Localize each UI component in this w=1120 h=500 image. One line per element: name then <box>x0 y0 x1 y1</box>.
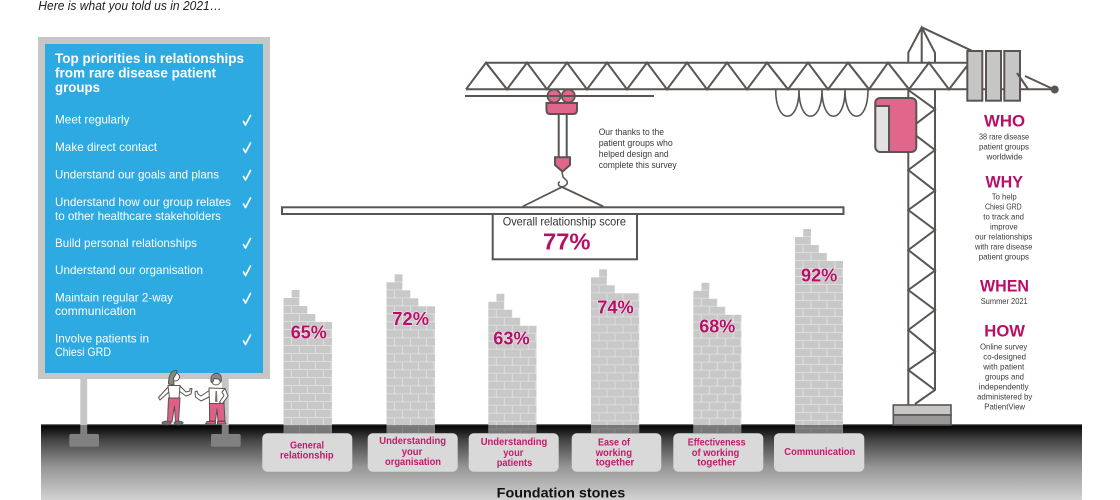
who block: 38 rare disease <box>979 132 1029 142</box>
panel heading: Top priorities in relationships <box>55 51 244 66</box>
label: ease of working together <box>572 433 661 472</box>
who block: WHO <box>984 113 1025 131</box>
label: understanding your patients <box>469 433 559 472</box>
icon: two people thumbs up <box>158 370 228 425</box>
priority list: Chiesi GRD <box>55 345 111 359</box>
why block: To help <box>992 191 1017 201</box>
why block: improve <box>990 221 1018 231</box>
brick column: effectiveness of working together 68% <box>693 283 741 433</box>
how block: co-designed <box>983 351 1026 361</box>
priority list: Understand our goals and plans <box>55 168 219 182</box>
suspended beam <box>282 207 844 214</box>
why block: WHY <box>986 173 1023 191</box>
priority list <box>55 112 231 359</box>
priority list: Meet regularly <box>55 112 130 126</box>
why block: with rare disease <box>974 241 1032 251</box>
woman <box>158 370 192 425</box>
brick column: communication 92% <box>795 229 843 433</box>
counterweights <box>967 51 1020 101</box>
panel heading: from rare disease patient <box>55 66 216 80</box>
cable loops <box>776 90 868 116</box>
label: understanding your organisation: Understanding <box>379 436 446 447</box>
thanks note <box>599 127 677 170</box>
crane mast top <box>908 27 972 63</box>
why block <box>974 173 1032 261</box>
crane tower <box>908 90 935 405</box>
how block: HOW <box>984 323 1025 341</box>
brick column: understanding your organisation 72%: 72% <box>392 309 429 329</box>
brick column: general relationship 65% <box>284 290 332 433</box>
label: effectiveness of working together: of working <box>692 448 739 459</box>
man <box>195 373 228 424</box>
panel: top priorities billboard <box>38 37 270 379</box>
brick column: understanding your patients 63%: 63% <box>493 329 530 349</box>
label: understanding your patients: your <box>503 448 523 459</box>
how block: administered by <box>977 391 1033 401</box>
crane <box>465 27 1059 425</box>
who block: worldwide <box>986 152 1023 162</box>
brick column: understanding your patients 63% <box>488 294 536 433</box>
label: general relationship <box>262 433 352 472</box>
who block <box>979 113 1029 162</box>
priority list: to other healthcare stakeholders <box>55 209 221 223</box>
priority list: Build personal relationships <box>55 236 197 250</box>
crane cab <box>874 97 917 152</box>
how block: PatientView <box>984 401 1026 411</box>
when block: WHEN <box>980 278 1029 296</box>
how block: independently <box>979 381 1029 391</box>
thanks note: helped design and <box>599 149 669 159</box>
brick column: understanding your organisation 72% <box>386 274 435 433</box>
brick column: ease of working together 74%: 74% <box>597 297 634 317</box>
priority list: communication <box>55 304 136 318</box>
label: ease of working together: working <box>595 448 632 459</box>
how block <box>977 323 1033 411</box>
priority list: Understand our organisation <box>55 263 203 277</box>
brick column: communication 92%: 92% <box>801 266 837 286</box>
thanks note: complete this survey <box>599 160 677 170</box>
how block: Online survey <box>980 341 1028 351</box>
billboard legs and feet <box>69 379 241 447</box>
who block: patient groups <box>979 142 1029 152</box>
priority list: Understand how our group relates <box>55 195 231 209</box>
thanks note: patient groups who <box>599 138 673 148</box>
label: communication <box>774 433 864 472</box>
why block: Chiesi GRD <box>985 201 1022 211</box>
label: understanding your patients: patients <box>497 458 533 469</box>
panel heading <box>55 51 244 95</box>
panel heading: groups <box>55 80 100 95</box>
icon: check marks <box>244 116 250 344</box>
why block: to track and <box>983 211 1024 221</box>
ground <box>41 424 1082 500</box>
brick column: ease of working together 74% <box>591 269 639 433</box>
label: understanding your organisation <box>368 433 458 472</box>
priority list: Make direct contact <box>55 140 158 154</box>
how block: groups and <box>985 371 1024 381</box>
overall relationship score box: Overall relationship score <box>503 215 626 229</box>
why block: our relationships <box>975 231 1032 241</box>
label: understanding your patients: Understanding <box>481 437 547 448</box>
crane jib <box>465 63 1054 96</box>
how block: with patient <box>982 361 1025 371</box>
brick column: effectiveness of working together 68%: 68% <box>699 317 735 337</box>
brick column: general relationship 65%: 65% <box>291 322 327 342</box>
jib end tie <box>1017 73 1059 94</box>
label: understanding your organisation: organisation <box>385 457 441 468</box>
label: general relationship: General <box>290 440 324 451</box>
label: understanding your organisation: your <box>402 447 422 458</box>
priority list: Involve patients in <box>55 332 149 346</box>
overall relationship score box: 77% <box>543 228 590 254</box>
label: ease of working together: together <box>596 458 634 469</box>
label: ease of working together: Ease of <box>598 437 631 448</box>
label: communication: Communication <box>784 447 855 458</box>
when block: Summer 2021 <box>981 296 1028 306</box>
trolley and hook <box>465 90 654 206</box>
why block: patient groups <box>979 251 1029 261</box>
thanks note: Our thanks to the <box>599 127 664 137</box>
overall relationship score box <box>493 214 637 259</box>
crane base <box>893 405 951 425</box>
label: effectiveness of working together: Effectiveness <box>688 437 746 448</box>
when block <box>980 278 1029 306</box>
label: general relationship: relationship <box>280 451 334 462</box>
priority list: Maintain regular 2-way <box>55 291 173 305</box>
label: effectiveness of working together: together <box>697 458 736 469</box>
label: effectiveness of working together <box>673 433 763 472</box>
